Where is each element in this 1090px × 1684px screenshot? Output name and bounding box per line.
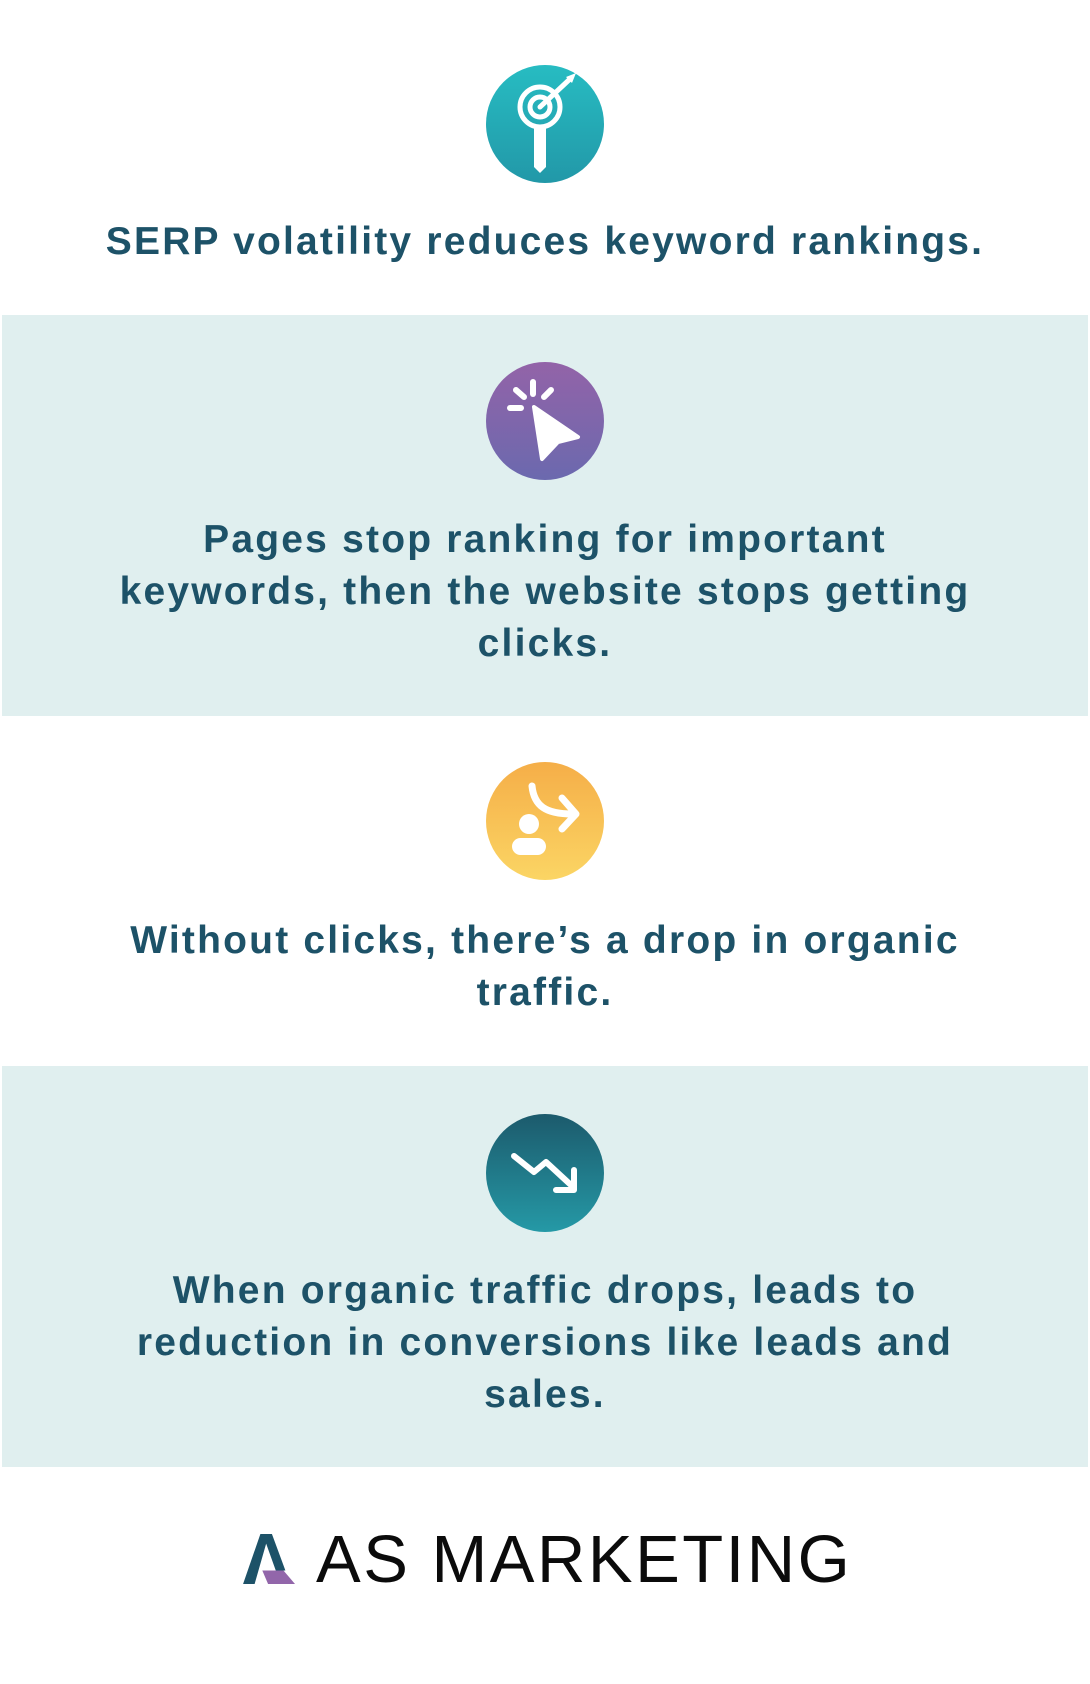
text: step 3 bbox=[130, 919, 960, 1014]
icon: click cursor bbox=[486, 362, 604, 480]
icon: trend down bbox=[486, 1114, 604, 1232]
icon: person redirect bbox=[486, 762, 604, 880]
text: step 4: sales. bbox=[484, 1373, 606, 1416]
text: step 4: When organic traffic drops, leads to bbox=[173, 1269, 917, 1312]
text: step 2: keywords, then the website stops getting bbox=[120, 570, 970, 613]
text: step 4: reduction in conversions like leads and bbox=[137, 1321, 953, 1364]
text: step 3: Without clicks, there’s a drop in organic bbox=[130, 919, 960, 962]
text: step 4 bbox=[137, 1269, 953, 1416]
text: step 2: Pages stop ranking for important bbox=[203, 518, 887, 561]
panel: step 4 background bbox=[2, 1066, 1088, 1467]
logo bbox=[243, 1522, 852, 1597]
icon: logo mark bbox=[243, 1534, 295, 1584]
text: step 2 bbox=[120, 518, 970, 665]
icon: target key bbox=[486, 65, 604, 183]
text: step 3: traffic. bbox=[477, 971, 613, 1014]
text: brand name: AS MARKETING bbox=[316, 1522, 852, 1597]
heading: step 1: SERP volatility reduces keyword rankings. bbox=[106, 220, 984, 263]
text: step 2: clicks. bbox=[478, 622, 612, 665]
panel: step 2 background bbox=[2, 315, 1088, 716]
